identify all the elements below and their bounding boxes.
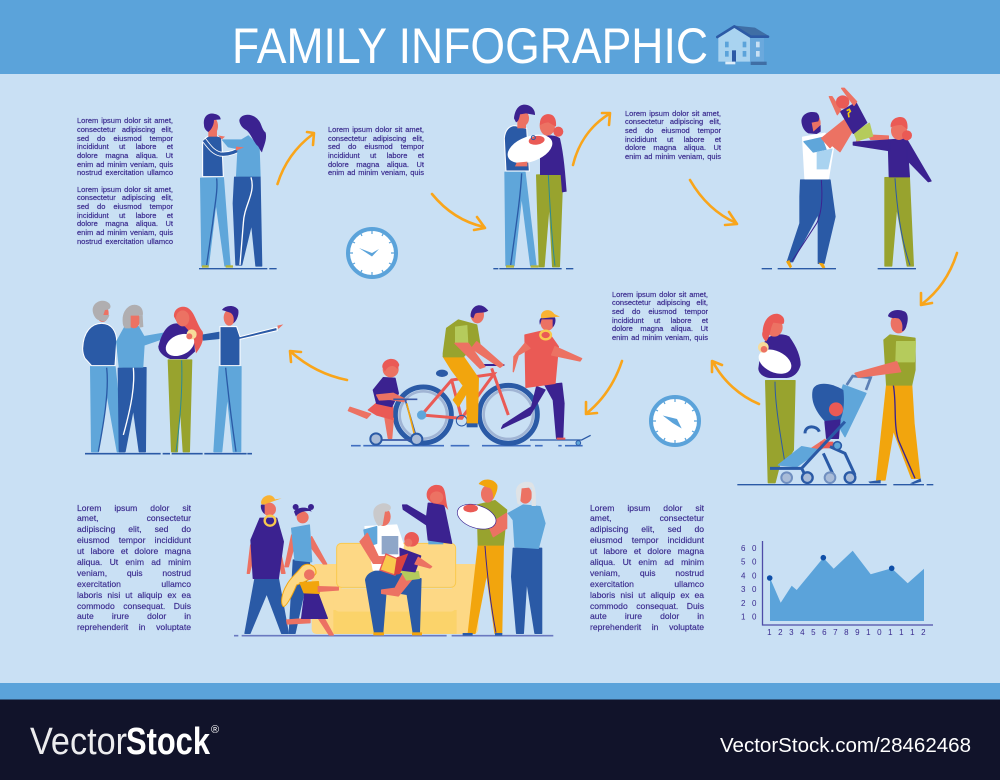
text block: intro one: [77, 116, 173, 177]
header band: [0, 0, 1000, 74]
y axis labels: 4: [741, 572, 746, 581]
text block: bottom left: ut labore et dolore magna: [77, 546, 191, 556]
father: [504, 105, 539, 268]
text block: second stage: dolore magna aliqua. Ut: [328, 160, 424, 169]
y axis labels: 0: [752, 585, 757, 594]
arrow: to lifting scene: [690, 180, 737, 225]
bicycle: [395, 365, 537, 443]
text block: intro one: dolore magna aliqua. Ut: [77, 151, 173, 160]
scene: family on sofa: [234, 479, 553, 636]
mother: [537, 114, 567, 267]
text block: intro two: incididunt ut labore et: [77, 211, 173, 220]
text block: third stage: sed do eiusmod tempor: [625, 126, 721, 135]
text block: intro two: Lorem ipsum dolor sit amet,: [77, 185, 173, 194]
text block: bottom left: reprehenderit in voluptate: [77, 622, 191, 632]
y axis labels: 5: [741, 558, 746, 567]
x axis labels: 5: [811, 628, 816, 637]
arrow: to generations: [290, 351, 347, 380]
text block: intro two: nostrud exercitation ullamco: [77, 237, 173, 246]
text block: bottom right: commodo consequat. Duis: [590, 601, 704, 611]
arrow: to newborn scene: [432, 194, 485, 230]
text block: second stage: enim ad minim veniam, quis: [328, 168, 424, 177]
text block: bottom right: adipiscing elit, sed do: [590, 524, 704, 534]
text block: second stage: Lorem ipsum dolor sit amet,: [328, 125, 424, 134]
y axis labels: [741, 544, 757, 622]
stroller: [770, 376, 871, 483]
text block: intro one: consectetur adipiscing elit,: [77, 125, 173, 134]
text block: bottom left: eiusmod tempor incididunt: [77, 535, 191, 545]
x axis labels: 1: [910, 628, 915, 637]
x axis labels: 1: [888, 628, 893, 637]
text block: intro two: enim ad minim veniam, quis: [77, 228, 173, 237]
arrow: couple to newborn: [278, 132, 314, 184]
scene: couple with newborn: [493, 105, 573, 269]
footer id: VectorStock.com/28462468: [720, 735, 971, 757]
text block: second stage: incididunt ut labore et: [328, 151, 424, 160]
arrow: to cycling text: [712, 361, 759, 404]
woman behind sofa: [403, 485, 452, 544]
text block: third stage: enim ad minim veniam, quis: [625, 152, 721, 161]
area chart: [741, 541, 933, 637]
text block: bottom right: aute irure dolor in: [590, 611, 704, 621]
x axis labels: 3: [789, 628, 794, 637]
text block: third stage: consectetur adipiscing elit,: [625, 117, 721, 126]
text block: bottom left: commodo consequat. Duis: [77, 601, 191, 611]
teen with cap: [245, 495, 288, 633]
y axis labels: 0: [752, 613, 757, 622]
text block: bottom left: laboris nisi ut aliquip ex ea: [77, 590, 191, 600]
text block: intro one: Lorem ipsum dolor sit amet,: [77, 116, 173, 125]
text block: intro one: nostrud exercitation ullamco: [77, 168, 173, 177]
text block: bottom left: adipiscing elit, sed do: [77, 524, 191, 534]
grandfather seated: [360, 503, 422, 635]
icon: clock two: [651, 397, 699, 445]
y axis labels: 3: [741, 585, 746, 594]
footer logo: Vector: [30, 721, 127, 763]
text block: bottom right: ut labore et dolore magna: [590, 546, 704, 556]
footer logo: [30, 721, 219, 763]
text block: second stage: [328, 125, 424, 177]
text block: bottom left: aute irure dolor in: [77, 611, 191, 621]
text block: bottom right: amet, consectetur: [590, 513, 704, 523]
text block: bottom left: amet, consectetur: [77, 513, 191, 523]
text block: intro two: consectetur adipiscing elit,: [77, 193, 173, 202]
grandmother: [117, 305, 163, 452]
text block: fourth stage: enim ad minim veniam, quis: [612, 333, 708, 342]
x axis labels: 2: [778, 628, 783, 637]
mother: [853, 117, 931, 266]
text block: bottom right: veniam, quis nostrud: [590, 568, 704, 578]
x axis labels: 0: [877, 628, 882, 637]
text block: bottom left: aliqua. Ut enim ad minim: [77, 557, 191, 567]
text block: fourth stage: sed do eiusmod tempor: [612, 307, 708, 316]
text block: third stage: dolore magna aliqua. Ut: [625, 143, 721, 152]
x axis labels: 6: [822, 628, 827, 637]
icon: house: [717, 26, 768, 65]
child with book: [380, 532, 432, 596]
text block: fourth stage: incididunt ut labore et: [612, 316, 708, 325]
x axis labels: 9: [855, 628, 860, 637]
text block: intro one: sed do eiusmod tempor: [77, 134, 173, 143]
man: [201, 114, 243, 268]
text block: bottom left: [77, 502, 192, 632]
sofa: [312, 543, 478, 634]
text block: fourth stage: dolore magna aliqua. Ut: [612, 324, 708, 333]
x axis labels: 4: [800, 628, 805, 637]
bottom band: [0, 683, 1000, 700]
footer bar: [0, 700, 1000, 780]
grandfather: [83, 301, 124, 452]
x axis labels: 1: [899, 628, 904, 637]
text block: second stage: sed do eiusmod tempor: [328, 142, 424, 151]
grandmother: [508, 482, 545, 633]
title: FAMILY INFOGRAPHIC: [232, 18, 708, 74]
text block: bottom right: eiusmod tempor incididunt: [590, 535, 704, 545]
text block: second stage: consectetur adipiscing elit,: [328, 134, 424, 143]
girl with buns: [285, 504, 327, 633]
text block: bottom right: laboris nisi ut aliquip ex ea: [590, 590, 704, 600]
little girl running: [282, 564, 338, 635]
y axis labels: 0: [752, 599, 757, 608]
text block: intro one: enim ad minim veniam, quis: [77, 160, 173, 169]
icon: clock one: [348, 229, 396, 277]
x axis labels: 2: [921, 628, 926, 637]
footer logo: ®: [211, 724, 219, 736]
text block: third stage: Lorem ipsum dolor sit amet,: [625, 109, 721, 118]
scene: parents lifting child: [762, 88, 931, 269]
y axis labels: 0: [752, 544, 757, 553]
x axis labels: [767, 628, 926, 637]
text block: bottom left: exercitation ullamco: [77, 579, 191, 589]
father: [855, 310, 921, 484]
text block: bottom right: aliqua. Ut enim ad minim: [590, 557, 704, 567]
x axis labels: 8: [844, 628, 849, 637]
mother: [755, 314, 801, 483]
child lifted: [829, 88, 888, 148]
arrow: to stroller scene: [921, 253, 957, 305]
y axis labels: 0: [752, 572, 757, 581]
child on scooter: [348, 359, 422, 445]
x axis labels: 1: [767, 628, 772, 637]
text block: intro two: dolore magna aliqua. Ut: [77, 219, 173, 228]
woman: [218, 115, 266, 266]
text block: third stage: [625, 109, 721, 161]
text block: bottom left: veniam, quis nostrud: [77, 568, 191, 578]
text block: intro one: incididunt ut labore et: [77, 142, 173, 151]
text block: fourth stage: consectetur adipiscing elit,: [612, 298, 708, 307]
father pointing: [203, 306, 283, 452]
x axis labels: 7: [833, 628, 838, 637]
scene: couple embracing: [199, 114, 277, 269]
father: [443, 305, 503, 427]
text block: bottom right: exercitation ullamco: [590, 579, 704, 589]
text block: third stage: incididunt ut labore et: [625, 135, 721, 144]
newborn: [504, 129, 556, 169]
arrow: newborn upward: [573, 113, 610, 165]
footer logo: Stock: [126, 721, 211, 763]
scene: three generations standing: [83, 301, 283, 454]
text block: bottom right: Lorem ipsum dolor sit: [590, 502, 704, 512]
mother with baby: [158, 307, 203, 452]
arrow: to cycling scene: [586, 361, 622, 414]
y axis labels: 1: [741, 613, 746, 622]
text block: fourth stage: Lorem ipsum dolor sit amet,: [612, 290, 708, 299]
y axis labels: 6: [741, 544, 746, 553]
x axis labels: 1: [866, 628, 871, 637]
text block: fourth stage: [612, 290, 708, 342]
father: [786, 112, 853, 268]
text block: bottom right: [590, 502, 704, 632]
text block: bottom left: Lorem ipsum dolor sit: [77, 502, 191, 512]
y axis labels: 0: [752, 558, 757, 567]
father with newborn: [454, 479, 507, 636]
text block: intro two: sed do eiusmod tempor: [77, 202, 173, 211]
scene: stroller walk: [737, 310, 933, 485]
teen on skateboard: [502, 310, 591, 445]
y axis labels: 2: [741, 599, 746, 608]
scene: family cycling: [348, 305, 591, 446]
text block: intro two: [77, 185, 173, 246]
text block: bottom right: reprehenderit in voluptate: [590, 622, 704, 632]
